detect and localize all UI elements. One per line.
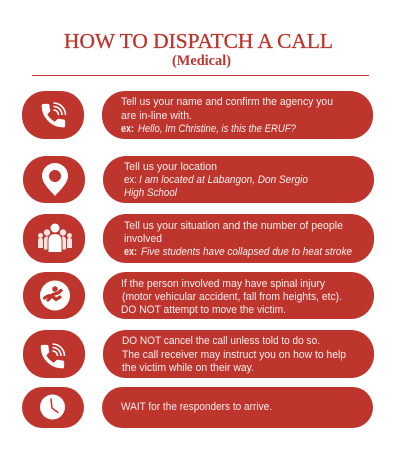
step 5: do not cancel — [23, 330, 374, 378]
pill: step 1 text: Hello, Im Christine, is this the ERUF? — [138, 123, 297, 135]
step 6: wait — [22, 387, 373, 428]
pill: step 3 text: Tell us your situation and the number of people — [124, 220, 343, 232]
pill: step 3 text: Five students have collapsed due to heat stroke — [141, 246, 352, 258]
pill: step 3 text: involved — [124, 233, 162, 245]
pill: step 4 text: DO NOT attempt to move the victim. — [121, 304, 286, 316]
step 4: spinal injury — [23, 272, 374, 319]
pill: step 3 text — [103, 214, 374, 263]
icon: phone badge — [23, 330, 85, 378]
icon: phone badge — [22, 91, 84, 139]
step 3: situation — [23, 214, 374, 263]
pill: step 2 text: I am located at Labangon, Don Sergio — [139, 174, 308, 186]
pill: step 3 text: ex: — [124, 246, 137, 258]
pill: step 1 text: are in-line with. — [121, 110, 192, 122]
icon: clock badge — [22, 387, 84, 428]
title: HOW TO DISPATCH A CALL — [64, 29, 333, 53]
icon: map pin badge — [23, 156, 85, 203]
step 2: location — [23, 156, 374, 203]
pill: step 2 text: ex: — [124, 174, 137, 186]
pill: step 2 text: Tell us your location — [124, 161, 217, 173]
pill: step 5 text: The call receiver may instruct you on how to help — [122, 349, 346, 361]
pill: step 4 text: If the person involved may have spinal injury — [121, 278, 325, 290]
icon: fallen person badge — [23, 272, 85, 319]
step 1: name and agency — [22, 91, 373, 139]
pill: step 5 text: DO NOT cancel the call unless told to do so. — [122, 335, 320, 347]
pill: step 2 text — [103, 156, 374, 203]
pill: step 4 text — [103, 272, 374, 319]
subtitle: (Medical) — [172, 53, 231, 69]
pill: step 6 text: WAIT for the responders to arrive. — [121, 401, 272, 413]
pill: step 2 text: High School — [124, 187, 177, 199]
pill: step 5 text: the victim while on their way. — [122, 362, 254, 374]
pill: step 1 text: ex: — [121, 123, 134, 135]
pill: step 1 text: Tell us your name and confirm the agency you — [121, 96, 333, 108]
pill: step 1 text — [102, 91, 373, 139]
icon: group of people badge — [23, 214, 85, 263]
pill: step 5 text — [103, 330, 374, 378]
pill: step 6 text — [102, 387, 373, 428]
pill: step 4 text: (motor vehicular accident, fall from heights, etc). — [122, 291, 342, 303]
